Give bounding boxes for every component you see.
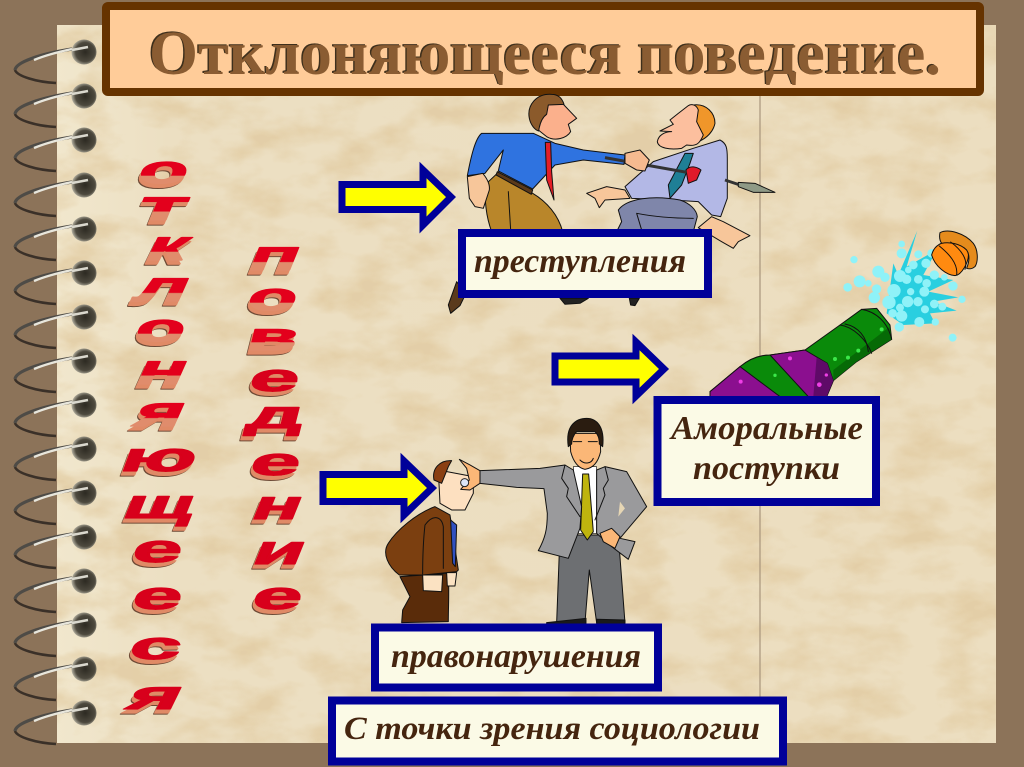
vertical word: поведение: и <box>246 527 315 573</box>
arrow to offences <box>323 461 432 515</box>
vertical word: отклоняющееся: т <box>130 181 198 229</box>
lower shoes below label <box>448 282 466 313</box>
vertical word: отклоняющееся: л <box>126 263 200 310</box>
vertical word: поведение: д <box>243 393 310 437</box>
label: offences <box>375 628 658 688</box>
victim left hand <box>587 187 630 208</box>
spiral binding <box>15 40 96 744</box>
vertical word: отклоняющееся: к <box>138 222 201 269</box>
vertical word: отклоняющееся: щ <box>116 482 205 527</box>
arrow to immoral acts <box>555 342 664 396</box>
attacker trousers <box>485 172 563 232</box>
boss trousers <box>557 535 625 623</box>
head <box>570 433 601 469</box>
vertical word: поведение: е <box>246 440 306 484</box>
title: Отклоняющееся поведение. <box>149 20 941 88</box>
vertical word: отклоняющееся: е <box>128 527 188 571</box>
tie <box>581 474 593 540</box>
vertical word: поведение: е <box>245 356 305 400</box>
red tie <box>545 142 554 200</box>
arrow to crimes <box>342 170 451 225</box>
small man tie <box>451 520 457 567</box>
vertical word: отклоняющееся: н <box>129 346 198 393</box>
vertical word: отклоняющееся: ю <box>115 434 205 480</box>
boss arm hand <box>459 459 480 490</box>
attacker fist <box>625 150 649 171</box>
spear <box>605 158 687 172</box>
shirt <box>573 467 597 533</box>
cork <box>932 231 977 276</box>
label: sociology viewpoint <box>332 700 783 762</box>
vertical word: поведение: е <box>248 574 308 618</box>
victim tie <box>668 153 693 198</box>
small man trousers <box>400 573 449 623</box>
label: immoral acts <box>658 400 876 502</box>
label: crimes: преступления <box>474 243 686 280</box>
label: immoral acts: Аморальные <box>669 410 863 447</box>
label: crimes <box>462 233 708 294</box>
small man head <box>438 470 473 510</box>
boss hand on pocket <box>600 528 620 548</box>
vertical word: поведение: о <box>243 275 303 319</box>
attacker head <box>538 102 577 139</box>
heart <box>686 167 701 183</box>
vertical word: отклоняющееся: о <box>134 148 194 192</box>
spray <box>843 231 966 342</box>
illustration: fight / crime <box>448 94 775 313</box>
jacket <box>480 465 582 558</box>
vertical word: отклоняющееся: с <box>125 624 187 668</box>
illustration: champagne bottle <box>710 231 977 397</box>
bottle <box>710 308 892 397</box>
label: sociology viewpoint: С точки зрения социологии <box>344 711 760 747</box>
vertical word: поведение: в <box>243 315 304 359</box>
vertical word: поведение: п <box>241 232 310 280</box>
belt <box>496 172 533 194</box>
vertical word: поведение: н <box>245 482 312 528</box>
label: immoral acts: поступки <box>693 450 840 487</box>
vertical word: поведение <box>241 232 315 618</box>
victim head <box>688 105 715 142</box>
attacker shirt <box>467 133 625 189</box>
victim shirt <box>625 140 727 217</box>
left hand <box>467 173 489 208</box>
man jacket <box>386 507 458 575</box>
small man hands <box>423 575 443 592</box>
label: offences: правонарушения <box>391 638 641 675</box>
vertical word: отклоняющееся: я <box>119 672 194 718</box>
illustration: scolding / offence <box>386 418 647 624</box>
vertical word: отклоняющееся: я <box>126 388 196 436</box>
victim trousers <box>617 198 697 232</box>
vertical word: отклоняющееся <box>115 148 205 718</box>
vertical word: отклоняющееся: е <box>128 574 188 618</box>
vertical word: отклоняющееся: о <box>131 306 191 350</box>
victim right hand <box>698 217 750 248</box>
